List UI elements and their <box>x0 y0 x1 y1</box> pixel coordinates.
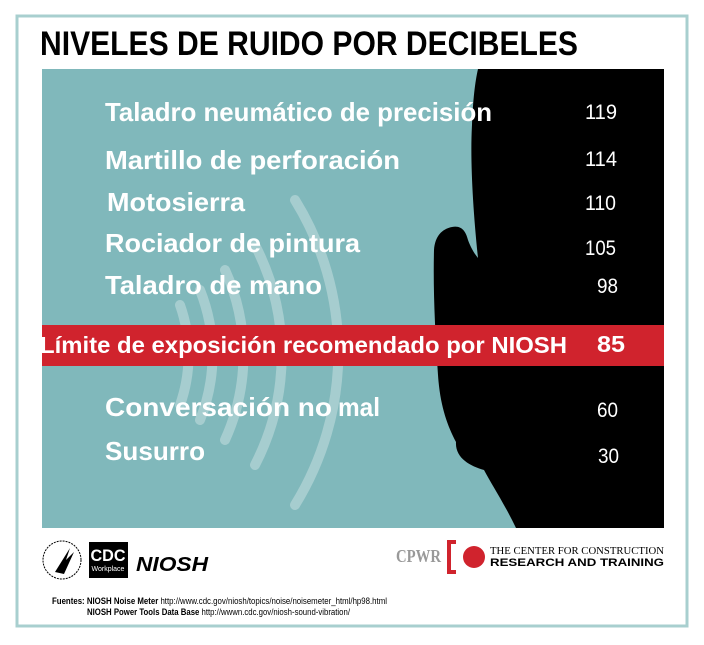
logo: CPWR <box>396 542 664 572</box>
decibel values <box>585 101 625 468</box>
red limit band <box>42 325 664 366</box>
decibel values: 85 <box>597 331 625 357</box>
logo: CPWR: THE CENTER FOR CONSTRUCTION <box>490 545 664 557</box>
list: noise sources: Martillo de perforación <box>105 145 400 175</box>
decibel values: 105 <box>585 237 616 260</box>
panel: chart background <box>42 69 664 528</box>
list: noise sources: Conversación no <box>105 392 332 422</box>
list: noise sources <box>40 97 567 466</box>
logos: HHS, CDC, NIOSH <box>43 541 209 579</box>
logo: CPWR: CPWR <box>396 546 442 566</box>
decibel values: 98 <box>597 275 618 298</box>
decibel values: 30 <box>598 445 619 468</box>
head silhouette <box>434 69 664 528</box>
decibel values: 119 <box>585 101 617 124</box>
logos: HHS, CDC, NIOSH: Workplace <box>92 566 125 573</box>
sources: NIOSH Power Tools Data Base http://wwwn.cdc.gov/niosh-sound-vibration/ <box>87 607 350 617</box>
decibel values: 110 <box>585 192 616 215</box>
decibel values: 114 <box>585 148 617 171</box>
logos: HHS, CDC, NIOSH: CDC <box>90 546 126 565</box>
sources <box>52 596 387 617</box>
list: noise sources: Taladro de mano <box>105 270 322 300</box>
list: noise sources: mal <box>338 392 380 422</box>
list: noise sources: Límite de exposición recomendado por NIOSH <box>40 332 567 358</box>
logo: CPWR: RESEARCH AND TRAINING <box>490 557 664 569</box>
sources: Fuentes: NIOSH Noise Meter http://www.cdc.gov/niosh/topics/noise/noisemeter_html/hp98.html <box>52 596 387 606</box>
sound waves <box>180 200 338 505</box>
list: noise sources: Motosierra <box>107 187 246 217</box>
title: NIVELES DE RUIDO POR DECIBELES <box>40 25 578 63</box>
list: noise sources: Rociador de pintura <box>105 228 361 258</box>
decibel values: 60 <box>597 399 618 422</box>
list: noise sources: Taladro neumático de precisión <box>105 97 492 127</box>
logos: HHS, CDC, NIOSH: NIOSH <box>136 554 209 576</box>
list: noise sources: Susurro <box>105 436 205 466</box>
